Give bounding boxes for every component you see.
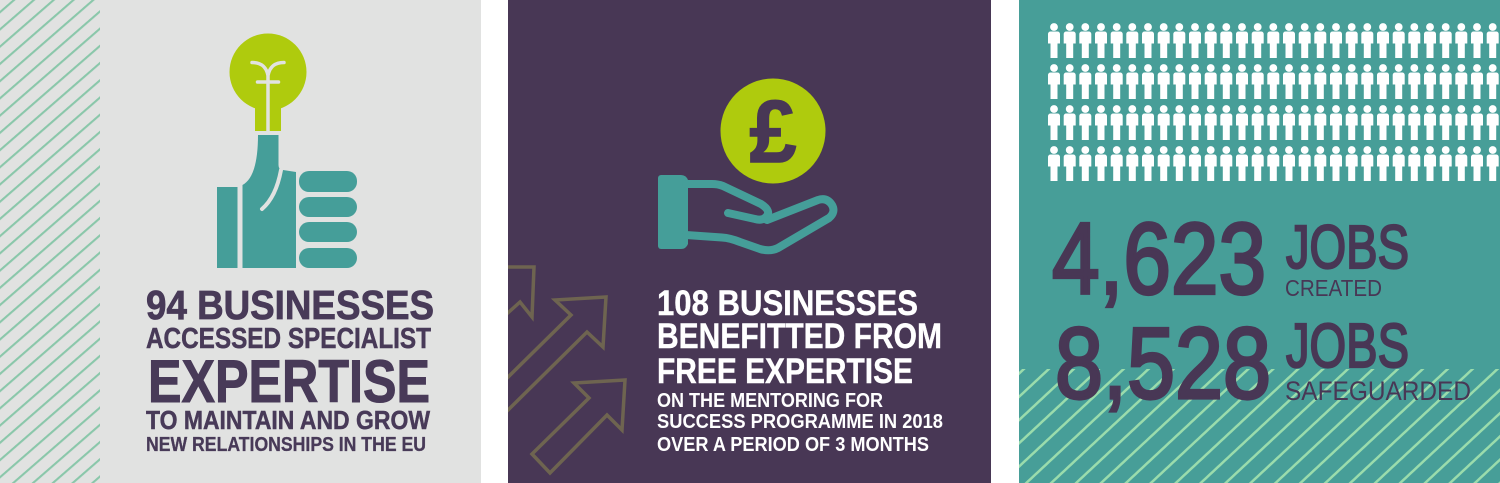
hatched lower area (1019, 369, 1500, 483)
label: jobs: JOBS (1286, 213, 1409, 281)
stat: 4,623: 4,623 (1052, 204, 1266, 316)
text: 94 businesses: 94 BUSINESSES (146, 282, 434, 328)
icon: pound coin: £ (750, 82, 797, 181)
stat: 8,528: 8,528 (1055, 308, 1271, 420)
hatched strip (0, 0, 100, 483)
label: jobs: JOBS (1286, 312, 1409, 381)
icon: lightbulb on thumbs up (217, 34, 357, 268)
panel: specialist expertise (0, 0, 481, 483)
text: on the mentoring for: ON THE MENTORING FOR (657, 389, 883, 412)
text: benefitted from: BENEFITTED FROM (657, 317, 942, 356)
label: created: CREATED (1285, 275, 1382, 301)
text: expertise: EXPERTISE (148, 348, 430, 415)
people grid (1048, 23, 1499, 181)
label: safeguarded: SAFEGUARDED (1285, 376, 1471, 406)
panel: jobs (1019, 0, 1500, 483)
text: to maintain and grow: TO MAINTAIN AND GROW (146, 405, 430, 435)
icon: pound coin (720, 78, 826, 184)
decorative arrows (500, 267, 625, 473)
icon: thumbs up hand (217, 135, 357, 268)
text: 108 businesses: 108 BUSINESSES (657, 284, 918, 323)
icon: open hand (658, 175, 833, 250)
text: success programme in 2018: SUCCESS PROGRAMME IN 2018 (657, 410, 943, 433)
text: accessed specialist: ACCESSED SPECIALIST (146, 323, 431, 355)
icon: lightbulb (230, 34, 306, 131)
panel: free expertise (500, 0, 991, 483)
text: new relationships in the EU: NEW RELATIONSHIPS IN THE EU (146, 434, 426, 456)
text: free expertise: FREE EXPERTISE (657, 352, 913, 391)
text: over a period of 3 months: OVER A PERIOD OF 3 MONTHS (657, 433, 929, 456)
